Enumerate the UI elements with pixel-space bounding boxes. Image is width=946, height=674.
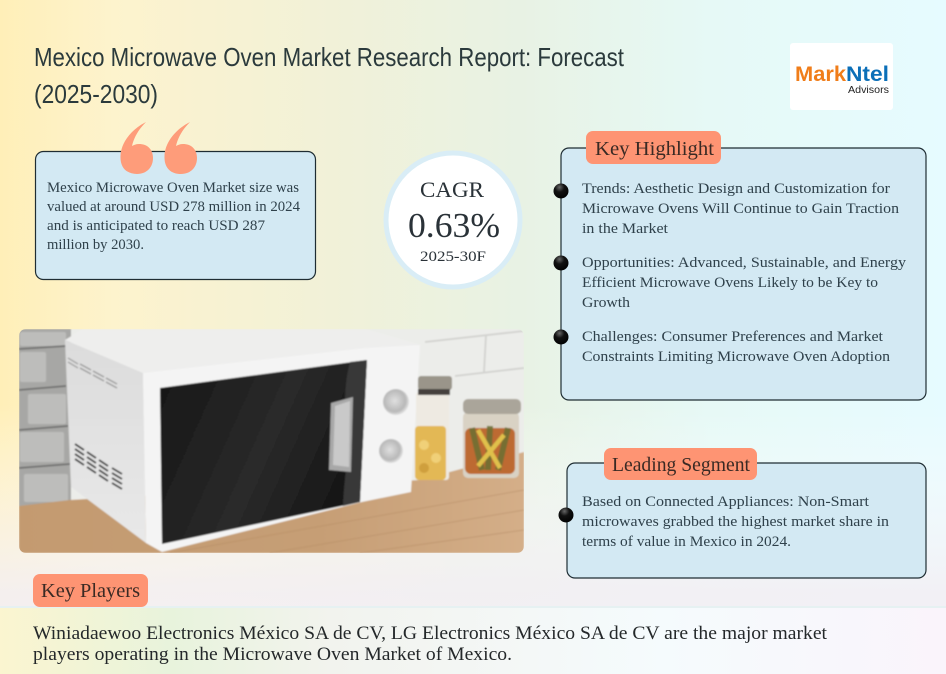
jar: fusilli [463, 412, 519, 478]
text: market size: and is anticipated to reach USD 287 [47, 218, 266, 234]
panel: market size summary [36, 122, 316, 280]
heading: key highlight [586, 131, 721, 164]
item: opportunities: Opportunities: Advanced, Sustainable, and Energy [582, 255, 907, 271]
item: challenges [554, 329, 891, 365]
logo: MarkNtel Advisors: Ntel [846, 63, 889, 86]
logo: MarkNtel Advisors [790, 43, 893, 110]
photo: microwave oven on a wooden counter [19, 329, 524, 553]
item: opportunities: Efficient Microwave Ovens Likely to be Key to [582, 275, 878, 291]
CAGR circle: 0.63% [408, 206, 500, 245]
heading: key players: Key Players [41, 580, 140, 602]
text: leading segment: terms of value in Mexico in 2024. [582, 534, 791, 550]
panel: leading segment [558, 448, 926, 578]
text: leading segment: Based on Connected Appliances: Non-Smart [582, 494, 870, 510]
brick wall left [19, 329, 71, 519]
heading: key players [33, 574, 148, 607]
CAGR circle: CAGR [420, 177, 484, 202]
text: market size: valued at around USD 278 million in 2024 [47, 199, 300, 215]
item: trends [554, 181, 900, 237]
item: trends: Trends: Aesthetic Design and Customization for [582, 181, 890, 197]
text: key players: players operating in the Microwave Oven Market of Mexico. [33, 644, 512, 665]
text: leading segment: microwaves grabbed the highest market share in [582, 514, 890, 530]
title: (2025-2030) [34, 79, 158, 109]
brick lines right [425, 331, 524, 376]
item: opportunities [554, 255, 907, 311]
heading: key highlight: Key Highlight [595, 138, 714, 160]
icon: quotation marks [120, 122, 197, 174]
CAGR circle: 2025-30F [420, 249, 486, 265]
heading: leading segment [604, 448, 757, 480]
title: Mexico Microwave Oven Market Research Report: Forecast [34, 42, 625, 72]
text: key players [33, 623, 828, 665]
bullet [558, 508, 574, 522]
text: leading segment [582, 494, 890, 550]
text: market size: Mexico Microwave Oven Market size was [47, 180, 299, 196]
CAGR circle [386, 153, 520, 287]
item: challenges: Challenges: Consumer Preferences and Market [582, 329, 884, 345]
item: trends: in the Market [582, 221, 669, 237]
item: trends: Microwave Ovens Will Continue to Gain Traction [582, 201, 900, 217]
text: market size [47, 180, 300, 253]
logo: MarkNtel Advisors: Advisors [848, 85, 889, 96]
jar: pasta shells [416, 392, 449, 480]
item: opportunities: Growth [582, 295, 631, 311]
title [34, 42, 625, 109]
text: market size: million by 2030. [47, 237, 144, 253]
item: challenges: Constraints Limiting Microwave Oven Adoption [582, 349, 891, 365]
panel: key highlight [554, 131, 926, 400]
heading: leading segment: Leading Segment [612, 454, 750, 476]
text: key players: Winiadaewoo Electronics México SA de CV, LG Electronics México SA de CV are the major market [33, 623, 828, 644]
logo: MarkNtel Advisors: Mark [795, 63, 846, 86]
